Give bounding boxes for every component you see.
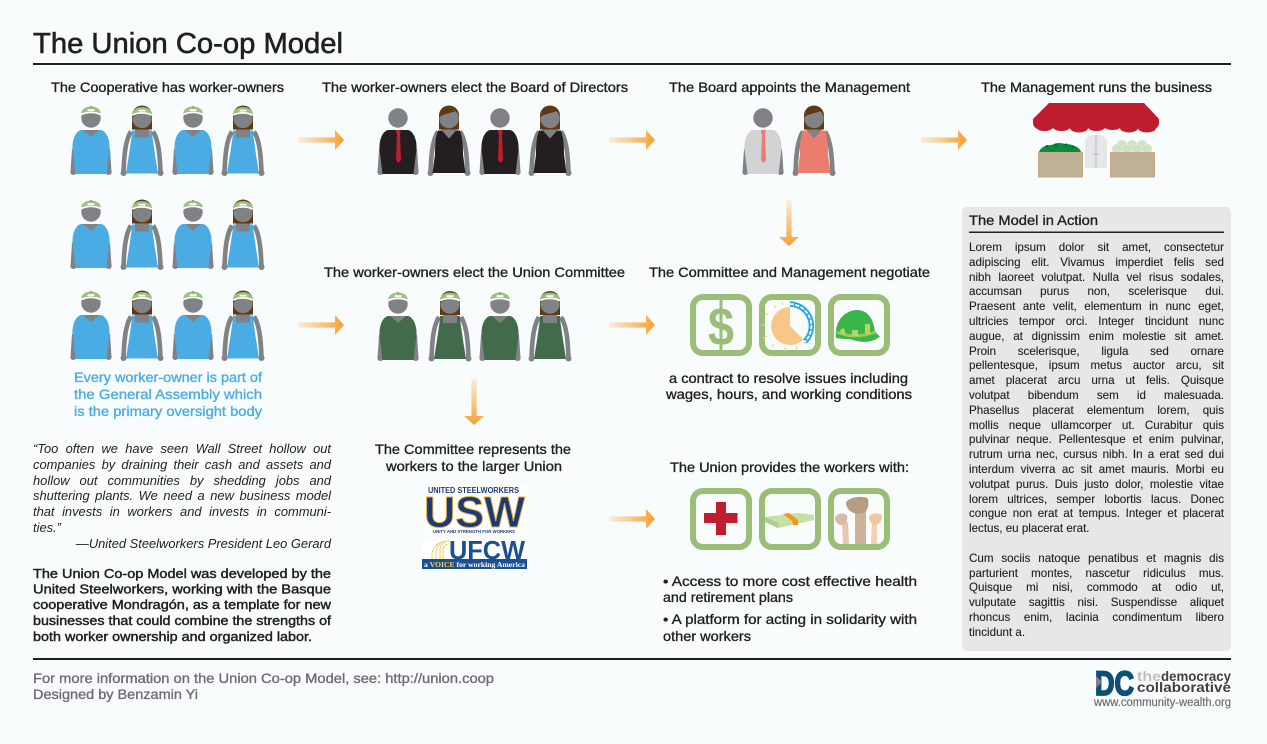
arrow: board to management <box>609 130 655 150</box>
panel: the model in action: The Model in Action <box>969 212 1098 228</box>
model in action body text: Phasellus placerat elementum lorem, quis <box>969 404 1224 417</box>
icons: wages hours conditions: $ <box>708 297 734 357</box>
quote <box>33 441 332 551</box>
heading: committee represents <box>375 441 571 474</box>
logo: USW: USW <box>424 488 525 537</box>
arrow: management to business <box>921 130 967 150</box>
quote: that invests in workers and invests in communi- <box>33 504 331 519</box>
benefits list: other workers <box>663 628 751 644</box>
model in action body text: augue, at dignissim enim molestie sit amet. <box>969 330 1224 343</box>
icon: market stall <box>1033 103 1159 177</box>
model in action body text: Proin scelerisque, ligula sed ornare <box>969 345 1224 358</box>
icons: wages hours conditions <box>693 297 887 357</box>
model in action body text: Praesent ante velit, elementum in nunc eget, <box>969 300 1224 313</box>
arrow: committee down to union <box>464 379 484 425</box>
benefits list: • Access to more cost effective health <box>663 573 917 589</box>
logo: democracy collaborative: the <box>1137 668 1161 684</box>
model in action body text: pellentesque, ipsum metus auctor arcu, sit <box>969 359 1224 372</box>
model in action body text: lorem ultrices, semper lobortis lacus. Donec <box>969 493 1224 506</box>
model in action body text: pulvinar neque. Pellentesque et enim pulvinar, <box>969 433 1224 446</box>
contract text: a contract to resolve issues including <box>669 370 908 386</box>
model in action body text: vulputate sagittis nisi. Suspendisse aliquet <box>969 596 1224 609</box>
model in action body text: rutrum urna nec, cursus nibh. In a erat sed dui <box>969 448 1224 461</box>
management figures <box>742 106 836 176</box>
logo: democracy collaborative: www.community-wealth.org <box>1093 697 1231 709</box>
heading: cooperative: The Cooperative has worker-owners <box>51 79 284 95</box>
quote: ties.” <box>33 520 61 535</box>
heading: board appoints: The Board appoints the Management <box>669 79 910 95</box>
model in action body text: interdum viverra ac sit amet mauris. Morbi eu <box>969 463 1224 476</box>
logo: UFCW: a VOICE for working America <box>424 560 525 569</box>
contract text <box>665 370 912 402</box>
model background text: both worker ownership and organized labor. <box>33 629 312 644</box>
logo: USW: UNITED STEELWORKERS <box>428 486 520 495</box>
model background text <box>33 566 332 644</box>
icons: healthcare retirement solidarity <box>693 491 887 547</box>
logo: democracy collaborative: collaborative <box>1137 679 1231 695</box>
arrow: workers to committee <box>298 315 344 335</box>
quote: “Too often we have seen Wall Street hollow out <box>33 441 331 456</box>
general assembly note <box>74 369 262 419</box>
union committee figures <box>377 291 572 362</box>
model in action body text: volutpat bibendum sem id malesuada. <box>969 389 1224 402</box>
heading: union provides: The Union provides the workers with: <box>670 459 909 475</box>
model background text: United Steelworkers, working with the Basque <box>33 582 331 596</box>
quote: hollow out communities by shedding jobs and <box>33 473 331 488</box>
arrow: workers to board <box>298 130 344 150</box>
logo: UFCW <box>422 535 527 569</box>
arrow: committee to negotiation <box>609 315 655 335</box>
benefits list: • A platform for acting in solidarity with <box>663 611 917 627</box>
model in action body text: tincidunt a. <box>969 626 1025 639</box>
general assembly note: is the primary oversight body <box>74 403 262 419</box>
benefits list: and retirement plans <box>663 589 793 605</box>
heading: elect committee: The worker-owners elect the Union Committee <box>324 264 625 280</box>
heading: management runs: The Management runs the business <box>981 79 1212 95</box>
footer credits: For more information on the Union Co-op Model, see: http://union.coop <box>33 670 494 686</box>
footer credits <box>33 670 494 702</box>
board of directors figures <box>377 106 572 176</box>
model in action body text: rhoncus enim, lacinia condimentum libero <box>969 611 1224 624</box>
model in action body text: amet placerat arcu urna ut felis. Quisque <box>969 374 1224 387</box>
model in action body text: ultricies tempor orci. Integer tincidunt nunc <box>969 315 1224 328</box>
heading: negotiate: The Committee and Management negotiate <box>649 264 930 280</box>
model in action body text: parturient montes, nascetur ridiculus mus. <box>969 567 1224 580</box>
general assembly note: Every worker-owner is part of <box>74 369 262 385</box>
quote: —United Steelworkers President Leo Gerard <box>76 536 331 551</box>
contract text: wages, hours, and working conditions <box>665 386 912 402</box>
model in action body text: Cum sociis natoque penatibus et magnis dis <box>969 552 1224 565</box>
arrow: union to benefits <box>609 509 655 529</box>
model in action body text <box>969 241 1224 639</box>
model in action body text: lectus, eu placerat erat. <box>969 522 1090 535</box>
benefits list <box>663 573 917 644</box>
heading: elect board: The worker-owners elect the Board of Directors <box>322 79 628 95</box>
heading: committee represents: workers to the larger Union <box>385 458 562 474</box>
model in action body text: Lorem ipsum dolor sit amet, consectetur <box>969 241 1224 254</box>
model in action body text: volutpat purus. Duis justo dolor, molestie vitae <box>969 478 1224 491</box>
model in action body text: adipiscing elit. Vivamus imperdiet felis sed <box>969 256 1224 269</box>
panel: the model in action <box>962 207 1231 651</box>
model background text: businesses that could combine the strengths of <box>33 613 331 628</box>
logo: democracy collaborative: democracy <box>1161 668 1231 684</box>
model in action body text: congue non erat at tempus. Integer et placerat <box>969 507 1224 520</box>
general assembly note: the General Assembly which <box>74 386 262 402</box>
heading: committee represents: The Committee represents the <box>375 441 571 457</box>
model in action body text: accumsan purus non, scelerisque dui. <box>969 285 1224 298</box>
arrow: management down to negotiation <box>779 200 799 246</box>
logo: USW: UNITY AND STRENGTH FOR WORKERS <box>433 529 516 535</box>
model in action body text: nibh laoreet volutpat. Nulla vel risus sodales, <box>969 271 1224 284</box>
title: The Union Co-op Model <box>33 28 343 60</box>
footer credits: Designed by Benzamin Yi <box>33 686 198 702</box>
logo: democracy collaborative: DC <box>1095 665 1134 703</box>
logo: UFCW: UFCW <box>449 535 525 565</box>
model in action body text: mollis neque ullamcorper ut. Curabitur quis <box>969 419 1224 432</box>
logo: democracy collaborative <box>1093 665 1231 709</box>
worker-owners grid <box>70 106 264 361</box>
model in action body text: Quisque mi nisi, commodo at odio ut, <box>969 581 1224 594</box>
model background text: The Union Co-op Model was developed by the <box>33 566 331 581</box>
quote: shuttering plants. We need a new business model <box>33 488 331 503</box>
quote: companies by draining their cash and assets and <box>33 457 331 472</box>
model background text: cooperative Mondragón, as a template for new <box>33 597 332 612</box>
